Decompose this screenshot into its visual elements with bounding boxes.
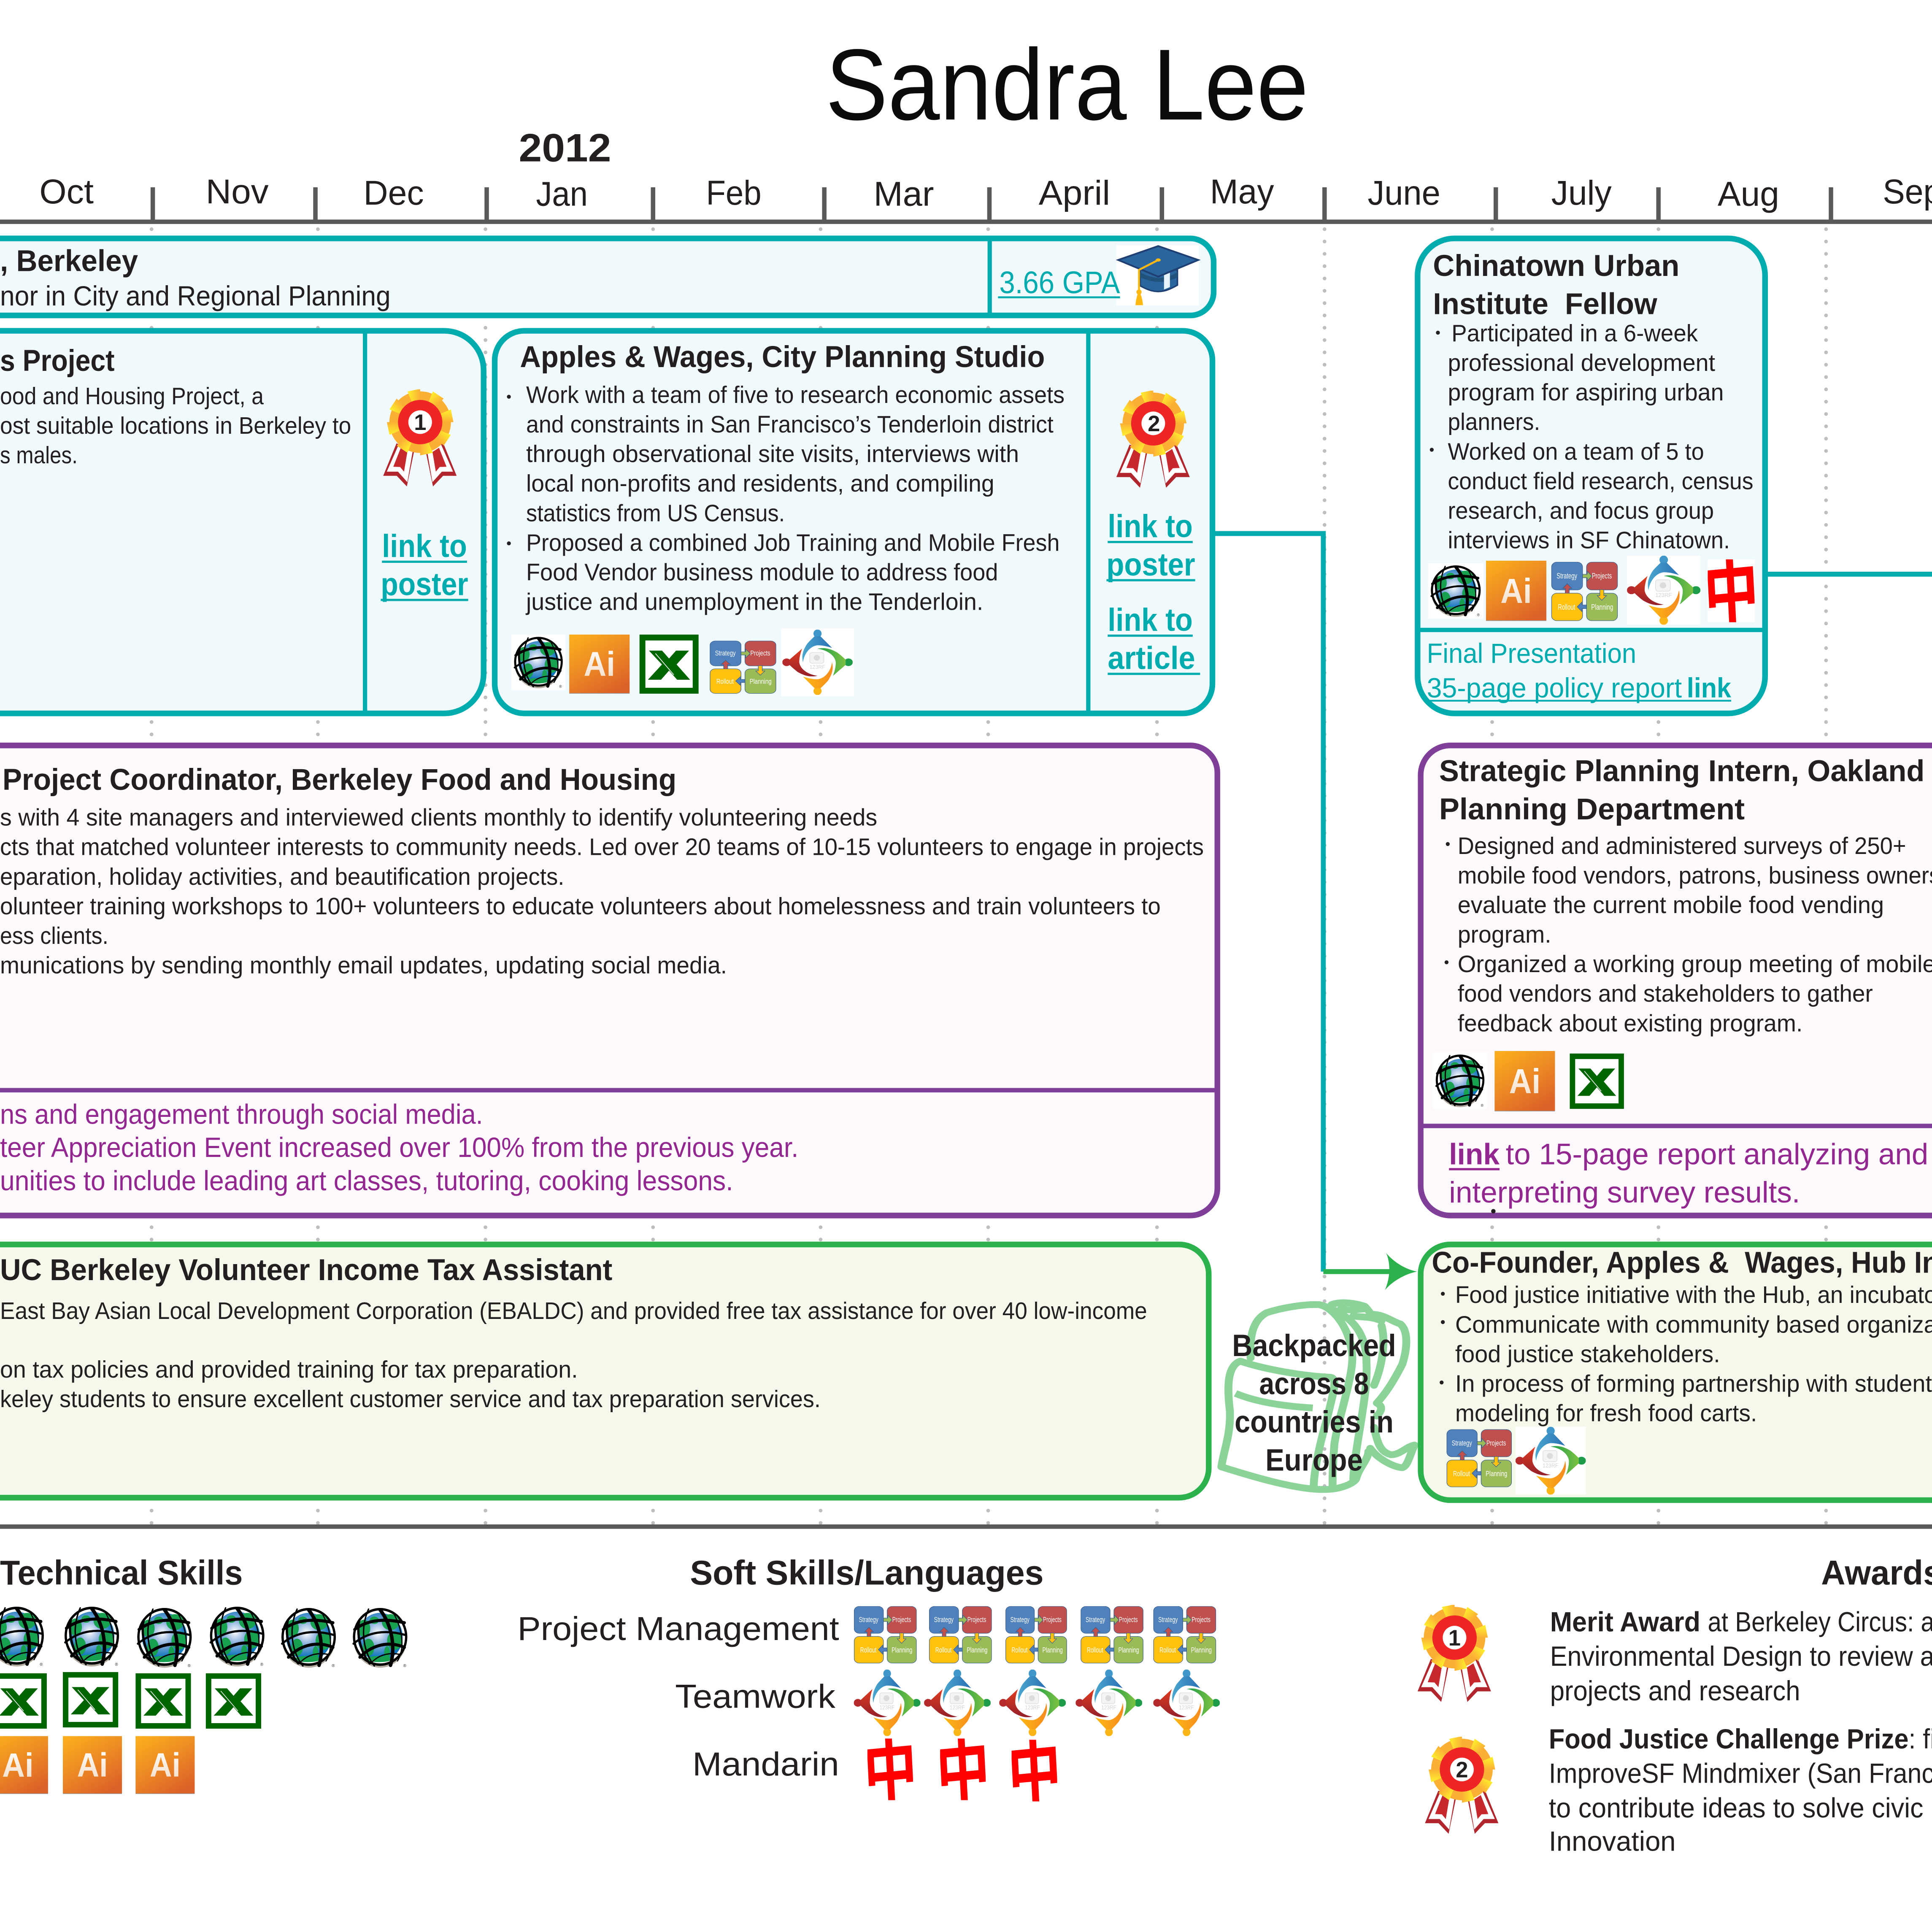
description: on tax policies and provided training for tax preparation. — [0, 1356, 578, 1383]
timeline axis with months: Feb — [706, 174, 762, 212]
description: Organized a working group meeting of mobile — [1458, 951, 1932, 978]
panel: Project Coordinator: Project Coordinator, Berkeley Food and Housing — [3, 763, 676, 797]
description: food vendors and stakeholders to gather — [1458, 980, 1873, 1007]
callout: backpacked across Europe: Europe — [1265, 1443, 1363, 1477]
link to poster — [381, 528, 468, 602]
description: ost suitable locations in Berkeley to — [0, 412, 351, 439]
skill labels — [518, 1610, 839, 1783]
report link: to 15-page report analyzing and — [1506, 1138, 1928, 1171]
description: food justice stakeholders. — [1455, 1340, 1720, 1367]
description: Food Vendor business module to address food — [526, 559, 998, 586]
heading — [1433, 249, 1679, 321]
description: evaluate the current mobile food vending — [1458, 892, 1884, 919]
project management icons — [854, 1606, 1216, 1663]
GPA link: 3.66 GPA — [999, 265, 1120, 300]
description: program for aspiring urban — [1448, 379, 1724, 406]
skill icons — [511, 628, 854, 696]
callout: backpacked across Europe: Backpacked — [1232, 1329, 1396, 1363]
description: Proposed a combined Job Training and Mobile Fresh — [526, 529, 1059, 556]
heading: Institute Fellow — [1433, 287, 1657, 321]
timeline axis with months: 2012 — [519, 126, 611, 170]
food justice prize text — [1549, 1724, 1932, 1856]
timeline axis with months: April — [1039, 174, 1110, 212]
description — [1430, 320, 1754, 554]
section: soft skills and languages — [518, 1554, 1220, 1821]
link to poster: poster — [381, 566, 468, 602]
link to poster: link to — [382, 528, 467, 564]
panel: education: , Berkeley — [0, 244, 138, 278]
description: Communicate with community based organiza — [1455, 1311, 1932, 1338]
food justice prize text: Innovation — [1549, 1826, 1676, 1856]
icon: award ribbon 2: 2 — [1456, 1758, 1468, 1783]
description: East Bay Asian Local Development Corporation (EBALDC) and provided free tax assistance for over 40 low-income — [0, 1297, 1147, 1324]
food justice prize text: to contribute ideas to solve civic — [1549, 1792, 1924, 1823]
timeline axis with months: June — [1368, 174, 1440, 212]
panel: Project Coordinator — [0, 746, 1219, 1216]
icon: award ribbon 1: 1 — [414, 410, 426, 435]
section: soft skills and languages: Soft Skills/Languages — [690, 1554, 1043, 1592]
timeline axis with months: Aug — [1718, 175, 1779, 213]
timeline axis with months: Dec — [363, 174, 424, 212]
links: link to — [1108, 508, 1193, 544]
responsibilities: s with 4 site managers and interviewed clients monthly to identify volunteering needs — [0, 804, 877, 831]
heading: Chinatown Urban — [1433, 249, 1679, 283]
section: technical skills — [0, 1554, 407, 1794]
final presentation and report links: link — [1687, 673, 1731, 703]
timeline axis with months: Jan — [536, 175, 588, 213]
outcomes: ns and engagement through social media. — [0, 1099, 483, 1129]
panel: Apples and Wages studio: Apples & Wages, City Planning Studio — [520, 340, 1045, 374]
description: feedback about existing program. — [1458, 1010, 1802, 1037]
responsibilities — [0, 804, 1204, 979]
callout: backpacked across Europe: countries in — [1235, 1405, 1394, 1439]
GIS skill icons — [0, 1608, 407, 1668]
panel: education — [0, 238, 1213, 316]
outcomes — [0, 1099, 798, 1196]
description: keley students to ensure excellent customer service and tax preparation services. — [0, 1386, 821, 1413]
skill icons — [1433, 1051, 1624, 1111]
Illustrator skill icons — [0, 1736, 195, 1794]
timeline axis with months: Mar — [873, 175, 934, 213]
description: and constraints in San Francisco’s Tenderloin district — [526, 411, 1054, 438]
panel: housing project — [0, 331, 484, 713]
icon: award ribbon 1 — [1418, 1604, 1491, 1702]
description: through observational site visits, interviews with — [526, 440, 1019, 467]
description: justice and unemployment in the Tenderloin. — [525, 589, 983, 616]
links: link to — [1108, 602, 1193, 638]
merit award text: projects and research — [1550, 1675, 1800, 1706]
description — [507, 381, 1065, 616]
description: ood and Housing Project, a — [0, 383, 264, 410]
links — [1106, 508, 1200, 676]
description: research, and focus group — [1448, 497, 1714, 524]
final presentation and report links: 35-page policy report — [1427, 673, 1682, 703]
description: Participated in a 6-week — [1451, 320, 1698, 347]
skill labels: Project Management — [518, 1610, 839, 1647]
responsibilities: ess clients. — [0, 922, 108, 949]
report link: link — [1449, 1138, 1500, 1171]
panel: housing project: s Project — [0, 344, 115, 378]
timeline axis with months: May — [1210, 173, 1274, 211]
skill labels: Teamwork — [675, 1678, 836, 1715]
merit award text: Merit Award — [1550, 1606, 1700, 1637]
icon: graduation cap — [1116, 245, 1199, 305]
timeline axis with months: Oct — [39, 173, 94, 211]
outcomes: teer Appreciation Event increased over 100% from the previous year. — [0, 1132, 798, 1163]
Mandarin icons — [860, 1710, 1064, 1821]
panel: Strategic Planning Intern — [1421, 746, 1932, 1216]
description: planners. — [1448, 408, 1540, 435]
timeline axis with months — [0, 126, 1932, 222]
description: interviews in SF Chinatown. — [1448, 527, 1730, 554]
responsibilities: olunteer training workshops to 100+ volunteers to educate volunteers about homelessness and train volunteers to — [0, 893, 1161, 920]
report link: interpreting survey results. — [1449, 1176, 1800, 1209]
responsibilities: munications by sending monthly email updates, updating social media. — [0, 952, 727, 979]
skill icons — [1428, 530, 1761, 643]
callout: backpacked across Europe: across 8 — [1259, 1367, 1369, 1401]
timeline axis with months: Nov — [206, 173, 269, 211]
timeline axis with months: July — [1551, 174, 1612, 212]
panel: Chinatown Urban Institute Fellow — [1418, 238, 1765, 713]
heading: Strategic Planning Intern, Oakland — [1439, 754, 1924, 788]
skill icons — [1447, 1427, 1586, 1495]
outcomes: unities to include leading art classes, tutoring, cooking lessons. — [0, 1165, 733, 1196]
description: Work with a team of five to research economic assets — [526, 381, 1065, 408]
callout: backpacked across Europe — [1232, 1329, 1396, 1477]
description: program. — [1458, 921, 1551, 948]
description: modeling for fresh food carts. — [1455, 1400, 1757, 1427]
section: technical skills: Technical Skills — [0, 1554, 243, 1592]
description: In process of forming partnership with student — [1455, 1370, 1932, 1397]
links: poster — [1106, 547, 1195, 583]
description: professional development — [1448, 349, 1715, 376]
links: article — [1108, 640, 1195, 676]
section: awards — [1418, 1554, 1932, 1856]
food justice prize text: Food Justice Challenge Prize — [1549, 1724, 1909, 1754]
heading: Planning Department — [1439, 792, 1745, 826]
panel: UC Berkeley Volunteer Income Tax Assistant: UC Berkeley Volunteer Income Tax Assistant — [0, 1253, 612, 1287]
heading — [1439, 754, 1924, 826]
description — [0, 1297, 1147, 1413]
description: Worked on a team of 5 to — [1448, 438, 1704, 465]
description — [1445, 832, 1932, 1037]
description — [0, 383, 351, 469]
icon: award ribbon 2: 2 — [1148, 411, 1160, 436]
Excel skill icons — [0, 1672, 261, 1729]
description: statistics from US Census. — [526, 500, 785, 527]
description: s males. — [0, 442, 78, 469]
final presentation and report links — [1427, 638, 1731, 703]
icon: award ribbon 1 — [383, 389, 457, 486]
icon: award ribbon 2 — [1116, 390, 1190, 488]
icon: award ribbon 1: 1 — [1448, 1626, 1461, 1651]
final presentation and report links: Final Presentation — [1427, 638, 1636, 669]
report link — [1449, 1138, 1928, 1209]
description: local non-profits and residents, and compiling — [526, 470, 994, 497]
illustration: backpack — [1221, 1303, 1415, 1489]
responsibilities: cts that matched volunteer interests to community needs. Led over 20 teams of 10-15 volunteers to engage in projects — [0, 834, 1204, 861]
connector: Apples and Wages to Co-Founder — [1213, 533, 1417, 1290]
panel: education: nor in City and Regional Planning — [0, 281, 391, 311]
panel: Apples and Wages studio — [494, 331, 1213, 713]
title: Sandra Lee — [826, 28, 1308, 141]
merit award text — [1550, 1606, 1932, 1706]
icon: award ribbon 2 — [1425, 1736, 1498, 1834]
responsibilities: eparation, holiday activities, and beautification projects. — [0, 863, 564, 890]
description: Designed and administered surveys of 250+ — [1458, 832, 1906, 859]
teamwork icons — [854, 1670, 1220, 1736]
panel: Co-Founder, Apples and Wages — [1421, 1244, 1932, 1500]
panel: UC Berkeley Volunteer Income Tax Assistant — [0, 1244, 1209, 1498]
description: conduct field research, census — [1448, 467, 1754, 494]
skill labels: Mandarin — [692, 1746, 839, 1783]
description — [1440, 1281, 1932, 1427]
connector: Chinatown fellow to the right — [1767, 573, 1932, 575]
